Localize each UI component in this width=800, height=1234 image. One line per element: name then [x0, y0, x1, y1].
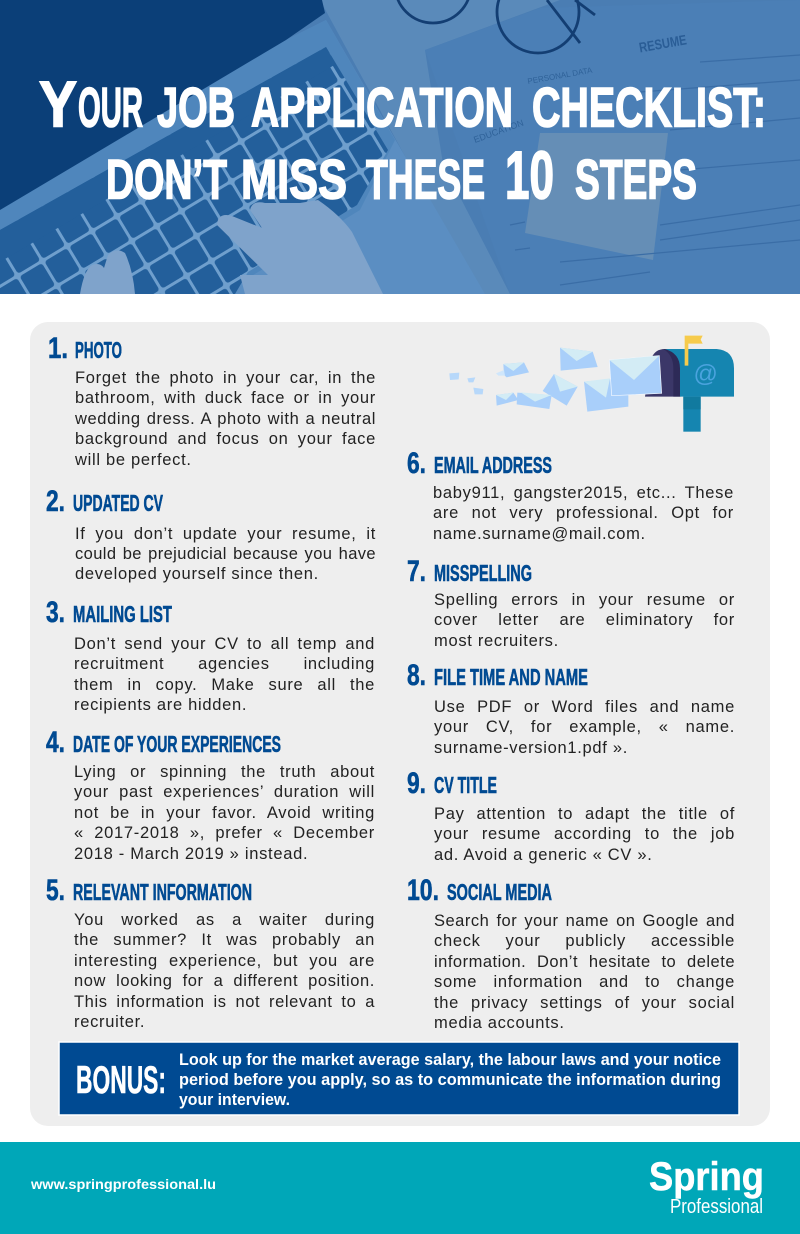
panel: checklist: [30, 322, 770, 1126]
keyboard top strip: [0, 47, 336, 262]
at sign: @: [693, 361, 718, 388]
heading 3: MAILING LIST: [73, 601, 172, 627]
text: item 10: some information and to change: [434, 973, 735, 991]
text: item 8: surname-version1.pdf ».: [434, 739, 628, 757]
resume labels: [472, 66, 594, 145]
text: item 9: Pay attention to adapt the title of: [434, 805, 735, 823]
text: item 3: [74, 635, 375, 714]
heading 6: EMAIL ADDRESS: [434, 452, 552, 478]
bonus text: [179, 1050, 721, 1109]
heading 6: 6.: [407, 447, 426, 480]
background desk: [0, 0, 800, 294]
text: item 4: Lying or spinning the truth about: [74, 763, 375, 781]
website url: www.springprofessional.lu: [30, 1176, 216, 1192]
text: item 1: will be perfect.: [75, 451, 192, 469]
heading 2: [46, 485, 163, 518]
footer: [0, 1142, 800, 1234]
text: item 4: 2018 - March 2019 » instead.: [74, 845, 308, 863]
text: item 3: them in copy. Make sure all the: [74, 676, 375, 694]
text: item 10: check your publicly accessible: [434, 932, 735, 950]
heading 3: 3.: [46, 596, 65, 629]
resume labels: PERSONAL DATA: [527, 66, 594, 86]
text: item 9: ad. Avoid a generic « CV ».: [434, 846, 653, 864]
text: item 4: your past experiences’ duration will: [74, 783, 375, 801]
title: THESE: [366, 148, 485, 210]
flag: [685, 336, 703, 366]
resume paper: [425, 0, 800, 294]
text: item 5: the summer? It was probably an: [74, 931, 375, 949]
text: item 5: This information is not relevant to a: [74, 993, 375, 1011]
heading 9: [407, 767, 497, 800]
mailbox body: [665, 349, 734, 397]
title: MISS: [241, 148, 347, 210]
laptop frame top band: [0, 20, 395, 294]
text: item 4: « 2017-2018 », prefer « December: [74, 824, 375, 842]
text: item 9: your resume according to the job: [434, 825, 735, 843]
logo: [649, 1155, 764, 1218]
envelopes: [449, 348, 662, 412]
text: item 5: interesting experience, but you are: [74, 952, 375, 970]
heading 7: 7.: [407, 555, 426, 588]
heading 9: 9.: [407, 767, 426, 800]
text: item 5: recruiter.: [74, 1013, 145, 1031]
header banner: [0, 0, 800, 294]
text: item 8: your CV, for example, « name.: [434, 718, 735, 736]
bonus label: BONUS:: [76, 1059, 166, 1102]
heading 4: [46, 726, 281, 759]
text: item 3: Don’t send your CV to all temp and: [74, 635, 375, 653]
text: item 6: baby911, gangster2015, etc... These: [433, 484, 734, 502]
text: item 7: [434, 591, 735, 650]
title: DON’T: [106, 148, 227, 210]
text: item 3: recruitment agencies including: [74, 655, 375, 673]
text: item 2: If you don’t update your resume, it: [75, 524, 376, 542]
text: item 2: developed yourself since then.: [75, 565, 319, 583]
resume labels: EDUCATION: [472, 118, 525, 145]
text: item 6: [433, 484, 734, 543]
heading 5: 5.: [46, 874, 65, 907]
title: [39, 68, 766, 214]
logo: Professional: [670, 1196, 763, 1218]
text: item 4: [74, 763, 375, 863]
text: item 6: are not very professional. Opt for: [433, 504, 734, 522]
heading 7: [407, 555, 532, 588]
hands: [217, 200, 383, 294]
heading 4: 4.: [46, 726, 65, 759]
text: item 3: recipients are hidden.: [74, 696, 247, 714]
heading 7: MISSPELLING: [434, 560, 532, 586]
text: item 5: now looking for a different position.: [74, 972, 375, 990]
callout: bonus: [58, 1041, 740, 1116]
text: item 10: [434, 912, 735, 1032]
heading 2: UPDATED CV: [73, 490, 163, 516]
text: item 7: cover letter are eliminatory for: [434, 611, 735, 629]
title: 10: [505, 138, 554, 214]
heading 10: SOCIAL MEDIA: [447, 879, 552, 905]
heading 9: CV TITLE: [434, 772, 497, 798]
text: item 7: Spelling errors in your resume or: [434, 591, 735, 609]
title: OUR: [78, 76, 143, 138]
text: item 10: Search for your name on Google and: [434, 912, 735, 930]
text: item 8: [434, 698, 735, 757]
text: item 7: most recruiters.: [434, 632, 559, 650]
title: STEPS: [575, 148, 697, 210]
heading 8: [407, 659, 588, 692]
heading 5: RELEVANT INFORMATION: [73, 879, 252, 905]
heading 1: PHOTO: [75, 337, 122, 363]
heading 3: [46, 596, 172, 629]
icon: mailbox with flying envelopes: [449, 336, 734, 432]
bonus text: Look up for the market average salary, the labour laws and your notice: [179, 1050, 721, 1069]
note on paper: [525, 133, 668, 260]
wood desk: [320, 0, 560, 294]
heading 6: [407, 447, 552, 480]
text: item 1: background and focus on your face: [75, 430, 376, 448]
text: item 5: [74, 911, 375, 1031]
bonus text: period before you apply, so as to communicate the information during: [179, 1070, 721, 1089]
text: item 9: [434, 805, 735, 864]
text: item 10: information. Don’t hesitate to delete: [434, 953, 735, 971]
text: item 1: Forget the photo in your car, in the: [75, 369, 376, 387]
heading 1: [48, 332, 122, 365]
mailbox door: [645, 349, 680, 397]
heading 4: DATE OF YOUR EXPERIENCES: [73, 731, 281, 757]
heading 5: [46, 874, 252, 907]
text: item 6: name.surname@mail.com.: [433, 525, 646, 543]
heading 8: FILE TIME AND NAME: [434, 664, 588, 690]
text: item 2: could be prejudicial because you have: [75, 545, 376, 563]
text: item 1: bathroom, with duck face or in your: [75, 389, 376, 407]
text: item 4: not be in your favor. Avoid writing: [74, 804, 375, 822]
heading 10: [407, 874, 552, 907]
title: JOB: [157, 76, 235, 138]
keyboard: [0, 47, 388, 294]
text: item 10: media accounts.: [434, 1014, 565, 1032]
resume word: RESUME: [638, 31, 688, 55]
resume lines: [510, 55, 800, 285]
heading 2: 2.: [46, 485, 65, 518]
heading 10: 10.: [407, 874, 439, 907]
heading 1: 1.: [48, 332, 68, 365]
text: item 1: [75, 369, 376, 469]
text: item 8: Use PDF or Word files and name: [434, 698, 735, 716]
laptop lid: [0, 0, 325, 210]
text: item 5: You worked as a waiter during: [74, 911, 375, 929]
glasses: [395, 0, 595, 53]
text: item 10: the privacy settings of your social: [434, 994, 735, 1012]
text: item 1: wedding dress. A photo with a neutral: [75, 410, 376, 428]
checklist headings: [46, 332, 588, 907]
heading 8: 8.: [407, 659, 426, 692]
laptop frame: [0, 20, 485, 294]
logo: Spring: [649, 1155, 764, 1199]
title: APPLICATION: [251, 76, 513, 138]
bonus text: your interview.: [179, 1090, 290, 1109]
title: Y: [39, 68, 77, 140]
post: [683, 397, 701, 432]
text: item 2: [75, 524, 376, 583]
